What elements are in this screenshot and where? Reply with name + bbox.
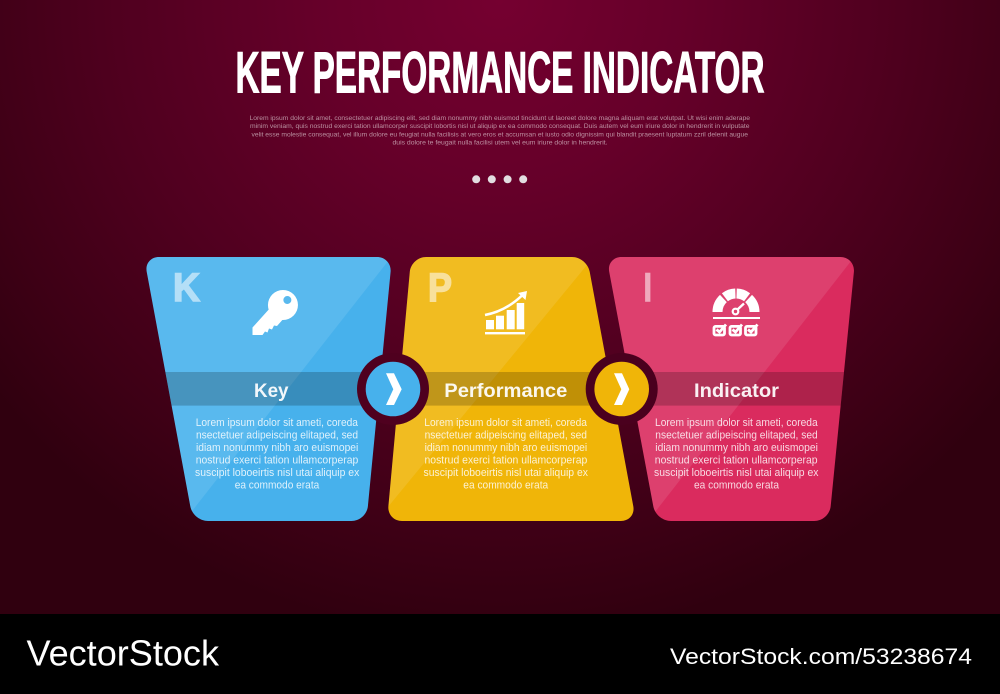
- icon: key: [252, 290, 298, 335]
- letter K: K: [173, 266, 200, 310]
- body text: indicator: idiam nonummy nibh aro euismopei: [655, 442, 818, 454]
- body text: key: suscipit loboeirtis nisl utai aliquip ex: [195, 467, 360, 479]
- pagination dots: [472, 175, 527, 183]
- intro paragraph: duis dolore te feugait nulla facilisi utem vel eum iriure dolor in hendrerit.: [392, 140, 608, 146]
- intro paragraph: minim veniam, quis nostrud exerci tation ullamcorper suscipit lobortis nisl ut aliquip ex ea commodo consequat. Duis autem vel eum iriure dolor in hendrerit in vulputate: [250, 123, 750, 130]
- body text: performance: Lorem ipsum dolor sit ameti, coreda: [424, 417, 587, 429]
- footer logo: VectorStock: [26, 632, 220, 674]
- body text: performance: suscipit loboeirtis nisl utai aliquip ex: [424, 467, 589, 479]
- body text: key: ea commodo erata: [235, 480, 319, 492]
- icon: growth chart: [485, 291, 527, 334]
- body text: key: [195, 417, 360, 492]
- letter I: I: [644, 266, 652, 310]
- arrow badge: key to performance: [357, 353, 429, 425]
- intro paragraph: Lorem ipsum dolor sit amet, consectetuer adipiscing elit, sed diam nonummy nibh euismod tincidunt ut laoreet dolore magna aliquam erat volutpat. Ut wisi enim aderape: [250, 115, 750, 122]
- body text: performance: [424, 417, 589, 492]
- body text: performance: nsectetuer adipeiscing elitaped, sed: [425, 430, 587, 442]
- body text: performance: ea commodo erata: [463, 480, 548, 492]
- letter P: P: [428, 266, 452, 310]
- body text: key: nsectetuer adipeiscing elitaped, sed: [196, 430, 358, 442]
- body text: key: Lorem ipsum dolor sit ameti, coreda: [196, 417, 358, 429]
- intro paragraph: velit esse molestie consequat, vel illum dolore eu feugiat nulla facilisis at vero eros et accumsan et iusto odio dignissim qui blandit praesent luptatum zzril delenit augue: [252, 131, 748, 138]
- footer url: VectorStock.com/53238674: [670, 644, 972, 669]
- footer bar: [0, 614, 1000, 694]
- body text: indicator: Lorem ipsum dolor sit ameti, coreda: [655, 417, 818, 429]
- body text: performance: nostrud exerci tation ullamcorperap: [424, 454, 587, 466]
- body text: indicator: nostrud exerci tation ullamcorperap: [655, 454, 818, 466]
- body text: key: idiam nonummy nibh aro euismopei: [196, 442, 358, 454]
- panel: performance: [388, 257, 634, 521]
- body text: indicator: suscipit loboeirtis nisl utai aliquip ex: [654, 467, 819, 479]
- heading: Performance: Performance: [444, 380, 567, 402]
- heading: Key: Key: [254, 380, 289, 402]
- intro paragraph: [250, 115, 750, 146]
- body text: indicator: ea commodo erata: [694, 480, 779, 492]
- panel: indicator: [608, 257, 854, 521]
- arrow badge: performance to indicator: [586, 353, 658, 425]
- blue card shape: [146, 257, 391, 521]
- body text: performance: idiam nonummy nibh aro euismopei: [425, 442, 587, 454]
- red card shape: [608, 257, 854, 521]
- heading: Indicator: Indicator: [694, 380, 779, 402]
- body text: indicator: [654, 417, 819, 492]
- icon: gauge and checklist: [713, 294, 760, 335]
- yellow card shape: [388, 257, 634, 521]
- body text: indicator: nsectetuer adipeiscing elitaped, sed: [655, 430, 818, 442]
- body text: key: nostrud exerci tation ullamcorperap: [196, 454, 358, 466]
- panel: key: [146, 257, 391, 521]
